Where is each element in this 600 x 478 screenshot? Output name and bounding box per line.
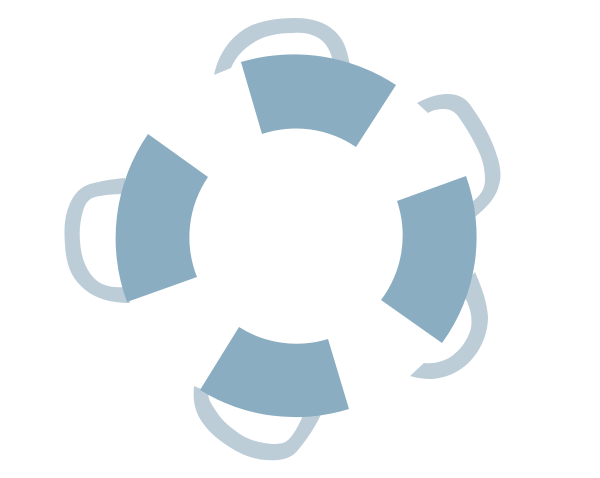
rope: top xyxy=(214,18,350,75)
rope: bottom xyxy=(194,386,323,460)
ropes around the lifebuoy xyxy=(64,18,500,460)
rope: left xyxy=(64,178,130,303)
segment: top xyxy=(241,54,396,147)
rope: lower right xyxy=(410,272,488,379)
rope: upper right xyxy=(417,94,500,217)
segment: bottom xyxy=(200,327,349,417)
segment: left xyxy=(116,134,208,302)
segment: right xyxy=(381,176,477,343)
ring segments xyxy=(116,54,477,417)
